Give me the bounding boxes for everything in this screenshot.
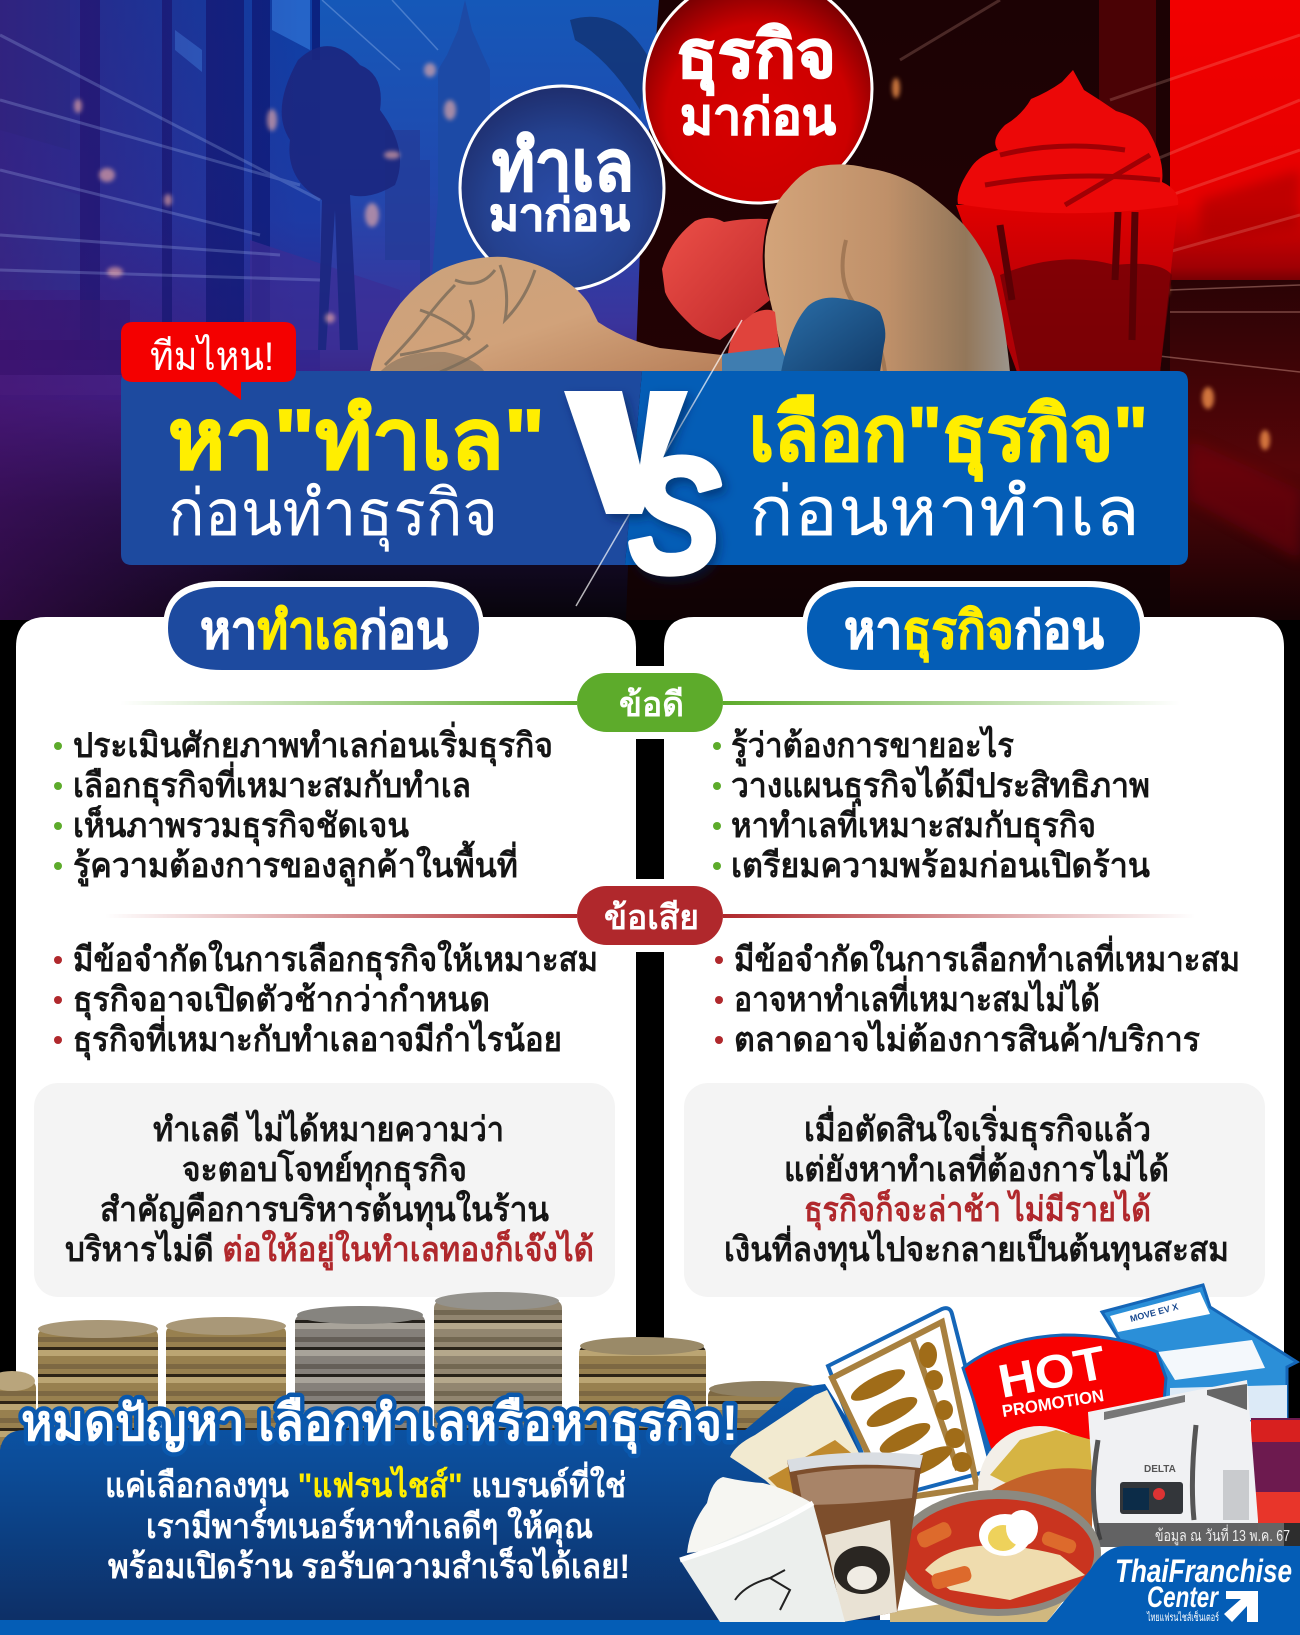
advantages list: location first: เลือกธุรกิจที่เหมาะสมกับทำเล [73, 761, 471, 807]
VS mark: S [629, 424, 721, 607]
coin stack 3 [295, 1306, 425, 1440]
icon: boxer left tattooed shoulder [370, 257, 722, 372]
advantages list: location first: รู้ความต้องการของลูกค้าในพื้นที่ [73, 840, 518, 887]
disadvantages list: business first: อาจหาทำเลที่เหมาะสมไม่ได้ [734, 975, 1100, 1019]
icon: brown bubble drink [787, 1452, 923, 1622]
banner body: แค่เลือกลงทุน "แฟรนไชส์" แบรนด์ที่ใช่ [105, 1461, 626, 1507]
icon: red boxing glove [662, 218, 782, 372]
note box: location first: ทำเลดี ไม่ได้หมายความว่า [153, 1109, 504, 1149]
note box: location first: จะตอบโจทย์ทุกธุรกิจ [182, 1149, 467, 1191]
circle: location first [460, 86, 664, 290]
note box: business first: ธุรกิจก็จะล่าช้า ไม่มีรายได้ [804, 1188, 1151, 1231]
note box: business first: แต่ยังหาทำเลที่ต้องการไม่ได้ [784, 1145, 1169, 1189]
headline right: เลือก"ธุรกิจ" [749, 392, 1148, 482]
headline panel [121, 371, 1188, 565]
icon: logo arrow [1224, 1591, 1258, 1622]
disadvantages badge: ข้อเสีย [604, 899, 699, 937]
bottom banner [0, 1384, 1300, 1635]
coin stack 5 [579, 1337, 706, 1440]
panel: business first [664, 581, 1284, 1635]
badge: hot promotion: HOT [994, 1335, 1110, 1408]
note box: business first: เมื่อตัดสินใจเริ่มธุรกิจแล้ว [804, 1105, 1151, 1151]
disadvantages list: location first: มีข้อจำกัดในการเลือกธุรกิจให้เหมาะสม [73, 939, 598, 981]
headline left: ก่อนทำธุรกิจ [168, 477, 498, 552]
icon: boxer right shoulder [765, 164, 1010, 372]
box under pot [890, 1583, 1077, 1622]
circle: business first: มาก่อน [680, 89, 836, 145]
disadvantages list: business first: ตลาดอาจไม่ต้องการสินค้า/บริการ [734, 1019, 1201, 1059]
advantages list: business first: รู้ว่าต้องการขายอะไร [731, 725, 1015, 767]
note box: location first: บริหารไม่ดี ต่อให้อยู่ในทำเลทองก็เจ๊งได้ [65, 1228, 594, 1271]
advantages badge: ข้อดี [619, 686, 684, 724]
date note [1097, 1523, 1300, 1547]
heading pill: location first: หาทำเลก่อน [200, 602, 448, 660]
circle: business first [644, 0, 872, 203]
coin stack 2 [166, 1317, 286, 1440]
advantages list: business first [713, 725, 1150, 885]
promo collage [680, 1285, 1300, 1622]
icon: skyscraper [430, 0, 490, 300]
icon: poster [1251, 1418, 1300, 1523]
disadvantages list: location first [54, 939, 598, 1061]
logo: ThaiFranchise Center: ไทยแฟรนไชส์เซ็นเตอร์ [1146, 1610, 1219, 1624]
disadvantages list: business first [715, 935, 1240, 1059]
note box: location first [34, 1083, 615, 1297]
note box: location first: สำคัญคือการบริหารต้นทุนในร้าน [100, 1189, 549, 1231]
icon: pot of tteokbokki [895, 1490, 1101, 1616]
badge: hot promotion: PROMOTION [1001, 1386, 1105, 1421]
coin stack 0 [0, 1371, 36, 1450]
logo: ThaiFranchise Center: Center [1147, 1581, 1220, 1614]
circle: business first: ธุรกิจ [676, 17, 836, 96]
heading pill: business first [802, 581, 1145, 674]
disadvantages list: business first: มีข้อจำกัดในการเลือกทำเลที่เหมาะสม [734, 935, 1240, 979]
advantages list: business first: หาทำเลที่เหมาะสมกับธุรกิจ [731, 801, 1096, 847]
icon: EV charger [1088, 1380, 1258, 1547]
banner body: เรามีพาร์ทเนอร์หาทำเลดีๆ ให้คุณ [146, 1506, 593, 1548]
logo: ThaiFranchise Center [1047, 1546, 1300, 1624]
banner body: พร้อมเปิดร้าน รอรับความสำเร็จได้เลย! [108, 1545, 630, 1586]
circle: location first: ทำเล [492, 127, 634, 205]
advantages divider [120, 666, 1180, 739]
banner title: หมดปัญหา เลือกทำเลหรือหาธุรกิจ! [21, 1395, 738, 1454]
thin divider light [576, 320, 742, 606]
speech bubble: which team [121, 322, 296, 400]
icon: EV charger: DELTA [1144, 1464, 1176, 1475]
heading pill: location first [163, 581, 484, 674]
icon: red milkshake [956, 70, 1178, 372]
badge: hot promotion [963, 1335, 1166, 1450]
disadvantages list: location first: ธุรกิจอาจเปิดตัวช้ากว่ากำหนด [73, 981, 490, 1021]
coin stack 1 [38, 1320, 158, 1440]
advantages list: business first: วางแผนธุรกิจได้มีประสิทธิภาพ [731, 765, 1150, 807]
VS mark [564, 391, 721, 607]
advantages badge [577, 673, 723, 732]
advantages list: location first [54, 721, 553, 887]
disadvantages badge [577, 886, 723, 945]
icon: blue EV house card: MOVE EV X [1129, 1301, 1179, 1324]
speech bubble: which team: ทีมไหน! [150, 334, 274, 379]
icon: milk tea cup [730, 1390, 860, 1530]
disadvantages list: location first: ธุรกิจที่เหมาะกับทำเลอาจมีกำไรน้อย [73, 1015, 562, 1061]
icon: blue boxing glove [722, 298, 885, 372]
icon: street building [0, 0, 400, 400]
headline right: ก่อนหาทำเล [749, 474, 1140, 550]
disadvantages divider [105, 879, 1195, 952]
note box: business first [684, 1083, 1265, 1297]
background: location side city scene [0, 0, 680, 620]
note box: business first: เงินที่ลงทุนไปจะกลายเป็นต้นทุนสะสม [724, 1225, 1229, 1271]
icon: food plate [978, 1426, 1102, 1550]
circle: location first: มาก่อน [489, 191, 630, 240]
headline left: หา"ทำเล" [168, 392, 545, 486]
coin stack 4 [434, 1292, 562, 1440]
icon: white frappe [680, 1477, 845, 1622]
icon: street tree [282, 46, 400, 350]
headline right [749, 392, 1148, 550]
coin stack 6 [708, 1381, 818, 1440]
headline left [168, 392, 545, 552]
icon: abacus [828, 1308, 992, 1500]
heading pill: business first: หาธุรกิจก่อน [844, 602, 1104, 663]
icon: blue EV house card [1102, 1285, 1297, 1420]
coin stacks [0, 1292, 818, 1450]
background: business side red scene [626, 0, 1300, 620]
advantages list: location first: ประเมินศักยภาพทำเลก่อนเริ่มธุรกิจ [73, 721, 553, 767]
advantages list: location first: เห็นภาพรวมธุรกิจชัดเจน [73, 804, 409, 847]
panel: location first [16, 581, 636, 1635]
banner body [105, 1461, 630, 1586]
advantages list: business first: เตรียมความพร้อมก่อนเปิดร้าน [731, 847, 1150, 885]
